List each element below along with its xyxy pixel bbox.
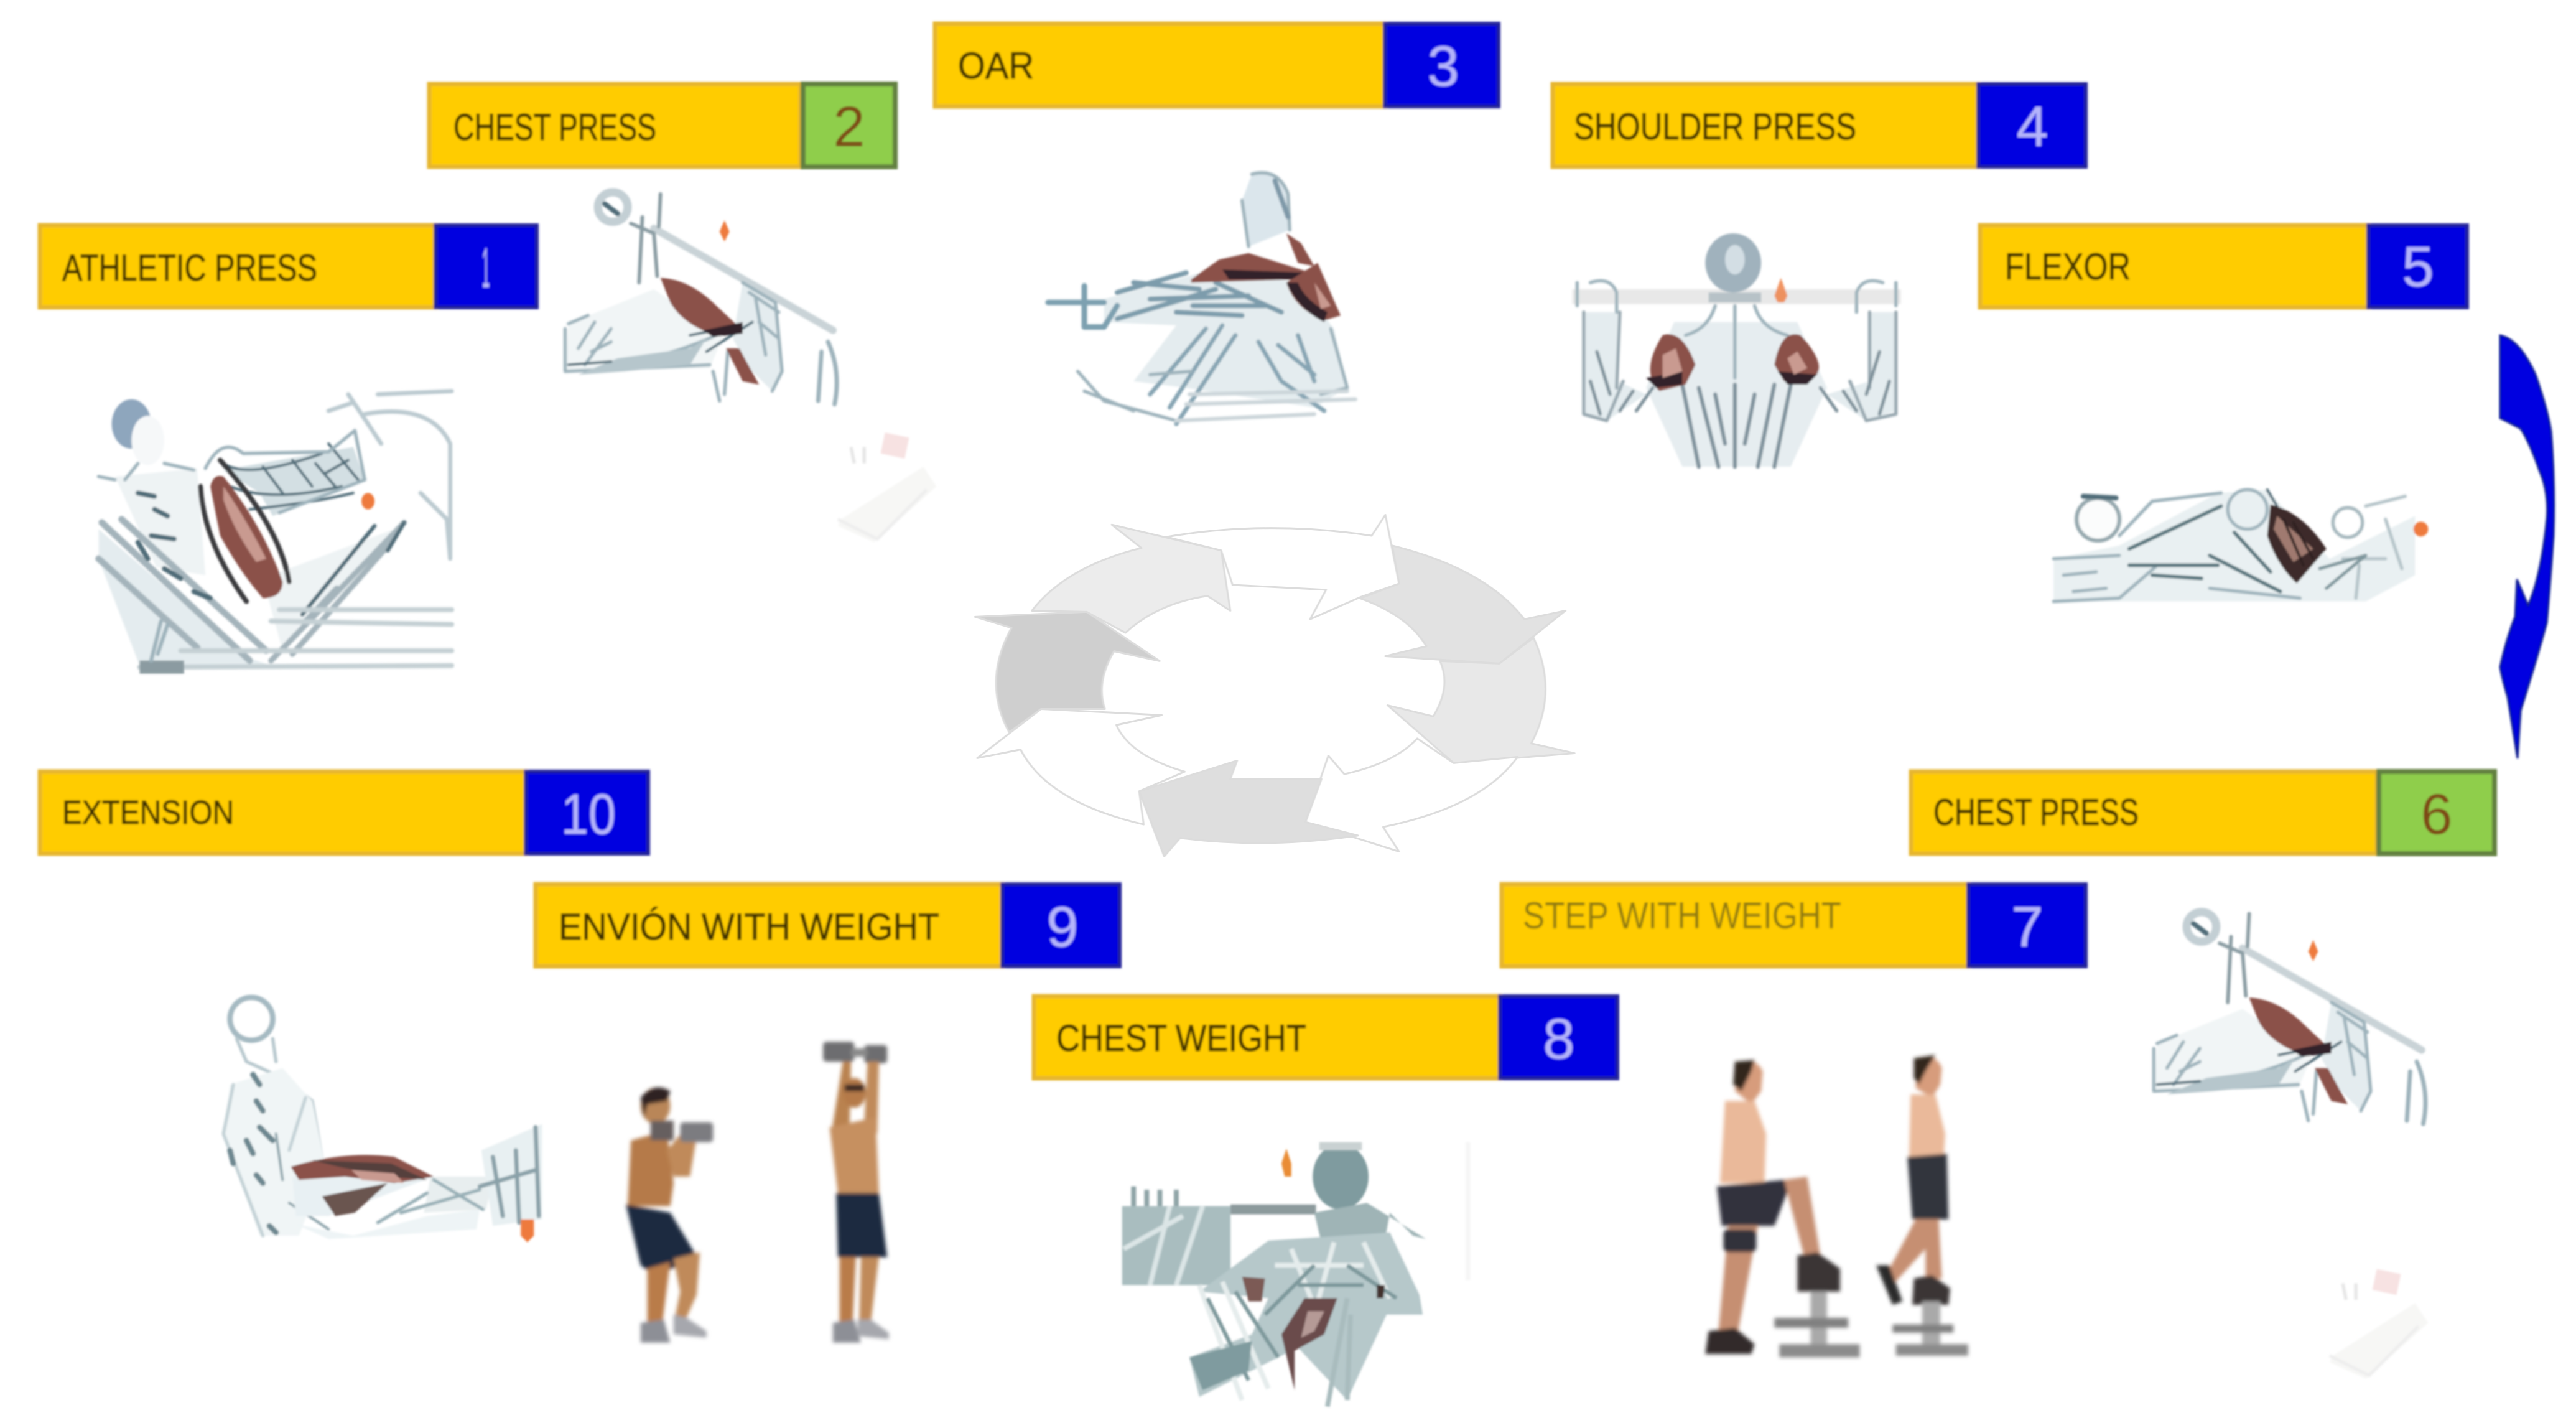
- bar 1: athletic press: [40, 225, 537, 307]
- bar 2: chest press: CHEST PRESS: [453, 106, 656, 148]
- bar 3: oar: [935, 24, 1499, 106]
- bar 6: chest press: 6: [2420, 783, 2453, 846]
- illustration 7: step with weight: [1705, 1055, 1968, 1357]
- illustration 10: leg extension: [223, 997, 542, 1243]
- bar 10: extension: [40, 772, 648, 854]
- bar 3: oar: OAR: [958, 45, 1034, 86]
- illustration 1: leg press: [98, 391, 452, 674]
- illustration 3: seated row: [1048, 173, 1355, 424]
- cycle arrow: left: [975, 612, 1160, 732]
- bar 4: shoulder press: [1553, 84, 2086, 167]
- bar 9: envion with weight: [536, 884, 1120, 966]
- bar 2: chest press: 2: [833, 95, 865, 159]
- bar 2: chest press: [429, 84, 895, 167]
- bar 10: extension: 10: [561, 783, 616, 846]
- bar 7: step with weight: 7: [2011, 895, 2044, 959]
- cycle arrow: lower right: [1306, 739, 1518, 852]
- cycle arrow: upper middle: [1166, 515, 1399, 619]
- bar 5: flexor: 5: [2402, 235, 2434, 299]
- illustration 8: lat pulldown: [1122, 1142, 1471, 1407]
- bar 4: shoulder press: 4: [2016, 95, 2048, 159]
- bar 1: athletic press: ATHLETIC PRESS: [62, 247, 317, 289]
- bar 6: chest press: CHEST PRESS: [1933, 791, 2139, 833]
- bar 5: flexor: FLEXOR: [2005, 246, 2131, 287]
- figure 7b: [1876, 1055, 1950, 1305]
- icon: faint clipboard near chest press: [838, 432, 936, 543]
- bar 7: step with weight: STEP WITH WEIGHT: [1523, 895, 1841, 936]
- cycle arrow: bottom: [1139, 760, 1358, 856]
- central cycle diagram: [975, 515, 1574, 856]
- bar 8: chest weight: [1034, 996, 1617, 1078]
- illustration 6: chest press on bench: [2154, 912, 2425, 1124]
- bar 9: envion with weight: ENVIÓN WITH WEIGHT: [559, 906, 939, 948]
- cycle arrow: right: [1388, 638, 1574, 763]
- illustration 5: leg flexor: [2053, 490, 2428, 602]
- bar 7: step with weight: [1502, 884, 2086, 966]
- bar 8: chest weight: CHEST WEIGHT: [1056, 1017, 1306, 1059]
- bar 3: oar: 3: [1427, 35, 1459, 98]
- illustration 4: shoulder press from behind: [1572, 233, 1901, 467]
- bar 1: athletic press: 1: [482, 236, 490, 300]
- bar 5: flexor: [1980, 225, 2467, 307]
- figure 7a: [1705, 1060, 1840, 1354]
- bar 9: envion with weight: 9: [1046, 895, 1079, 959]
- cycle arrow: upper right: [1360, 546, 1566, 663]
- bench 7b: [1892, 1302, 1968, 1356]
- cycle arrow: upper left: [1032, 525, 1230, 633]
- bar 6: chest press: [1911, 772, 2495, 854]
- figure 9b: [823, 1042, 889, 1343]
- cycle arrow: lower left: [977, 709, 1184, 824]
- figure 9a: [626, 1088, 713, 1343]
- icon: blue curved arrow: [2500, 335, 2554, 758]
- icon: faint clipboard near chest press 6: [2330, 1269, 2428, 1379]
- bar 10: extension: EXTENSION: [62, 794, 234, 831]
- bench 7a: [1774, 1292, 1860, 1357]
- bar 4: shoulder press: SHOULDER PRESS: [1574, 106, 1856, 147]
- illustration 9: envion with weight: [626, 1042, 889, 1343]
- bar 8: chest weight: 8: [1543, 1007, 1575, 1071]
- illustration 2: chest press on bench: [565, 192, 837, 404]
